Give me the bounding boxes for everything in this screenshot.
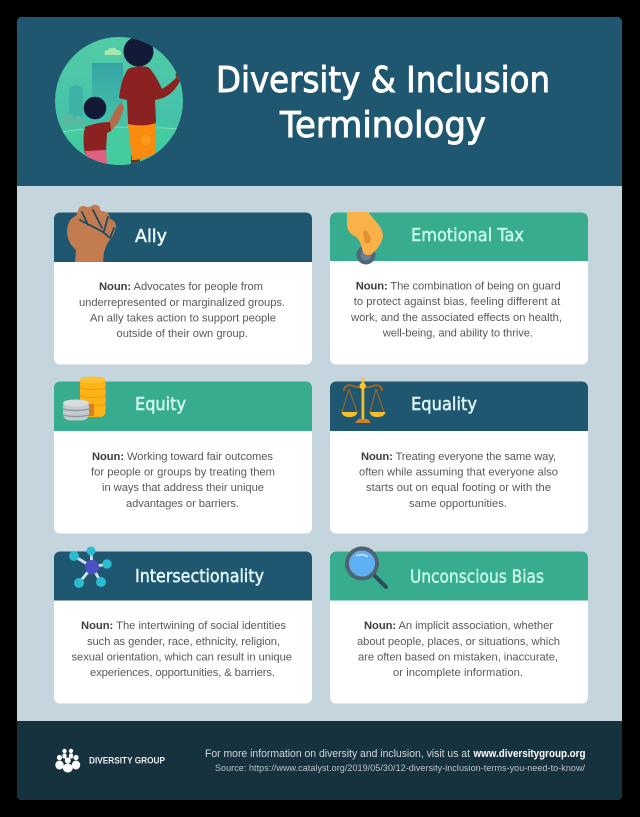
panel: Ally card — [54, 205, 312, 364]
definition text: Noun: Treating everyone the same way, — [361, 451, 556, 463]
icon: group of people logo — [55, 749, 80, 772]
definition text: Noun: The intertwining of social identities — [81, 620, 286, 632]
panel: Equality card — [330, 378, 588, 534]
definition text: or incomplete information. — [393, 667, 523, 679]
source line: Source: https://www.catalyst.org/2019/05/30/12-diversity-inclusion-terms-you-need-to-know/ — [215, 763, 585, 773]
title: Terminology — [279, 105, 486, 146]
panel: Unconscious Bias card — [330, 548, 588, 704]
definition text: outside of their own group. — [116, 328, 248, 340]
heading: Unconscious Bias — [410, 568, 544, 588]
definition text: in ways that address their unique — [102, 482, 264, 494]
definition text: for people or groups by treating them — [91, 466, 275, 478]
definition text — [359, 451, 558, 510]
definition text — [350, 280, 562, 340]
definition text: underrepresented or marginalized groups. — [79, 297, 285, 309]
definition text: are often based on mistaken, inaccurate, — [358, 652, 558, 664]
definition text: Noun: Working toward fair outcomes — [92, 451, 273, 463]
definition text — [357, 620, 560, 679]
definition text: Noun: An implicit association, whether — [364, 620, 553, 632]
panel: header — [17, 17, 622, 186]
logo text: DIVERSITY GROUP — [89, 756, 165, 766]
panel: Equity card — [54, 376, 312, 534]
icon: balance scale — [342, 378, 386, 423]
definition text: An ally takes action to support people — [90, 312, 276, 324]
panel: footer — [17, 721, 622, 800]
title — [216, 60, 550, 146]
definition text — [72, 620, 292, 679]
definition text: work, and the associated effects on health, — [350, 312, 562, 324]
icon: adult and child illustration — [55, 36, 183, 170]
icon: connected nodes — [69, 546, 112, 588]
heading: Equity — [135, 395, 186, 415]
heading: Equality — [411, 395, 477, 415]
heading: Ally — [135, 227, 167, 247]
definition text: Noun: Advocates for people from — [99, 281, 263, 293]
title: Diversity & Inclusion — [216, 60, 550, 101]
icon: raised fist — [67, 205, 116, 262]
panel: Intersectionality card — [54, 546, 312, 704]
footer info line — [206, 749, 585, 760]
definition text: advantages or barriers. — [126, 498, 239, 510]
definition text: well-being, and ability to thrive. — [382, 328, 533, 340]
definition text: about people, places, or situations, which — [357, 636, 560, 648]
heading: Emotional Tax — [411, 226, 524, 246]
definition text: Noun: The combination of being on guard — [356, 280, 561, 292]
adult — [131, 155, 140, 164]
definition text: same opportunities. — [409, 498, 507, 510]
definition text: to protect against bias, feeling different at — [354, 296, 561, 308]
definition text: often while assuming that everyone also — [359, 466, 558, 478]
definition text — [91, 451, 275, 510]
definition text — [79, 281, 285, 340]
definition text: sexual orientation, which can result in unique — [72, 652, 292, 664]
definition text: such as gender, race, ethnicity, religion, — [87, 636, 280, 648]
definition text: experiences, opportunities, & barriers. — [90, 667, 275, 679]
icon: hand holding coin — [347, 212, 383, 264]
child — [108, 102, 124, 132]
definition text: starts out on equal footing or with the — [366, 482, 551, 494]
panel: Emotional Tax card — [330, 212, 588, 364]
footer info line: www.diversitygroup.org — [473, 748, 586, 760]
footer info line: For more information on diversity and inclusion, visit us at — [205, 748, 470, 760]
heading: Intersectionality — [135, 567, 264, 587]
icon: magnifying glass — [347, 548, 386, 587]
icon: coin stacks — [63, 376, 106, 420]
